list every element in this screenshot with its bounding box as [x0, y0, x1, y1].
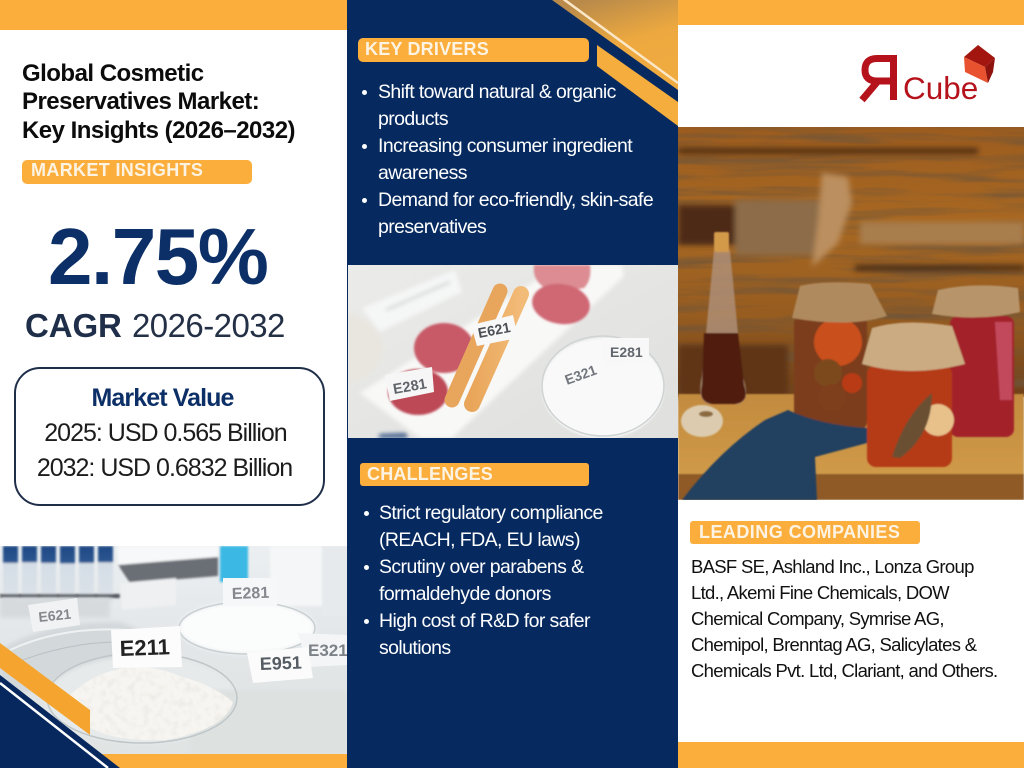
sausages [452, 291, 521, 404]
challenges list: (REACH, FDA, EU laws) [379, 529, 580, 551]
companies text: Ltd., Akemi Fine Chemicals, DOW [691, 582, 949, 603]
sample labels: E281 [232, 585, 270, 603]
corner accent [552, 0, 678, 126]
table [678, 394, 1024, 500]
challenges pill [360, 463, 589, 486]
sample labels [385, 315, 649, 401]
panel: middle column [347, 0, 678, 768]
companies text: Chemipol, Brenntag AG, Salicylates & [691, 634, 976, 655]
CAGR label [25, 307, 285, 344]
key drivers list: preservatives [378, 216, 486, 238]
sample labels: E321 [563, 362, 599, 388]
sample labels: E321 [308, 641, 347, 660]
2032 value: 2032: USD 0.6832 Billion [37, 454, 292, 482]
sample labels: E951 [259, 653, 302, 674]
blue cloth [682, 410, 867, 500]
logo: Cube [903, 70, 978, 106]
CAGR figure: 2.75% [48, 212, 267, 301]
sample labels: E621 [477, 319, 512, 341]
companies text: Chemicals Pvt. Ltd, Clariant, and Others. [691, 660, 998, 681]
key drivers pill [358, 38, 589, 62]
challenges list: formaldehyde donors [379, 583, 551, 605]
panel: left column [0, 0, 347, 768]
title: Preservatives Market: [22, 88, 259, 115]
companies text: Chemical Company, Symrise AG, [691, 608, 944, 629]
photo: meats and additive labels [348, 265, 678, 438]
left back jar [792, 282, 887, 430]
salt dish [542, 336, 664, 438]
challenges list [364, 502, 603, 659]
2025 value: 2025: USD 0.565 Billion [44, 419, 287, 447]
photo: pickled vegetable jars on wood [678, 127, 1024, 500]
sample labels: E281 [610, 344, 643, 360]
logo [859, 45, 995, 106]
CAGR period: 2026-2032 [132, 307, 285, 344]
sample labels: E281 [392, 376, 428, 398]
panel: right column [678, 0, 1024, 768]
garlic [681, 405, 723, 437]
challenges list: solutions [379, 637, 451, 659]
challenges list: High cost of R&D for safer [379, 610, 590, 632]
challenges list: Scrutiny over parabens & [379, 556, 584, 578]
sample labels: E621 [38, 606, 72, 625]
key drivers list [362, 81, 653, 238]
companies text [691, 556, 998, 681]
right back jar [932, 285, 1020, 437]
sample labels [28, 578, 348, 683]
key drivers list: Demand for eco-friendly, skin-safe [378, 189, 653, 211]
title [22, 60, 295, 144]
bottle [700, 232, 746, 404]
key drivers list: products [378, 108, 448, 130]
corner accent [0, 643, 120, 768]
title: Key Insights (2026–2032) [22, 117, 295, 144]
powder mound [47, 653, 237, 743]
bottom band [678, 742, 1024, 768]
bottom band [100, 754, 347, 768]
market value card [14, 367, 325, 506]
photo: lab dishes with additive labels [0, 546, 347, 768]
front jar [862, 322, 965, 467]
key drivers list: Shift toward natural & organic [378, 81, 616, 103]
challenges list: Strict regulatory compliance [379, 502, 603, 524]
CAGR word: CAGR [25, 307, 122, 344]
top band [0, 0, 347, 30]
meat slices [388, 265, 593, 415]
challenges pill: CHALLENGES [367, 464, 493, 484]
title: Global Cosmetic [22, 60, 204, 87]
top band [678, 0, 1024, 25]
key drivers list: awareness [378, 162, 467, 184]
sample labels: E211 [119, 634, 170, 661]
key drivers list: Increasing consumer ingredient [378, 135, 632, 157]
market insights pill: MARKET INSIGHTS [31, 160, 203, 180]
key drivers pill: KEY DRIVERS [365, 39, 489, 59]
market insights pill [22, 160, 252, 184]
market value heading: Market Value [91, 384, 234, 412]
companies text: BASF SE, Ashland Inc., Lonza Group [691, 556, 974, 577]
leading companies pill: LEADING COMPANIES [699, 522, 900, 542]
